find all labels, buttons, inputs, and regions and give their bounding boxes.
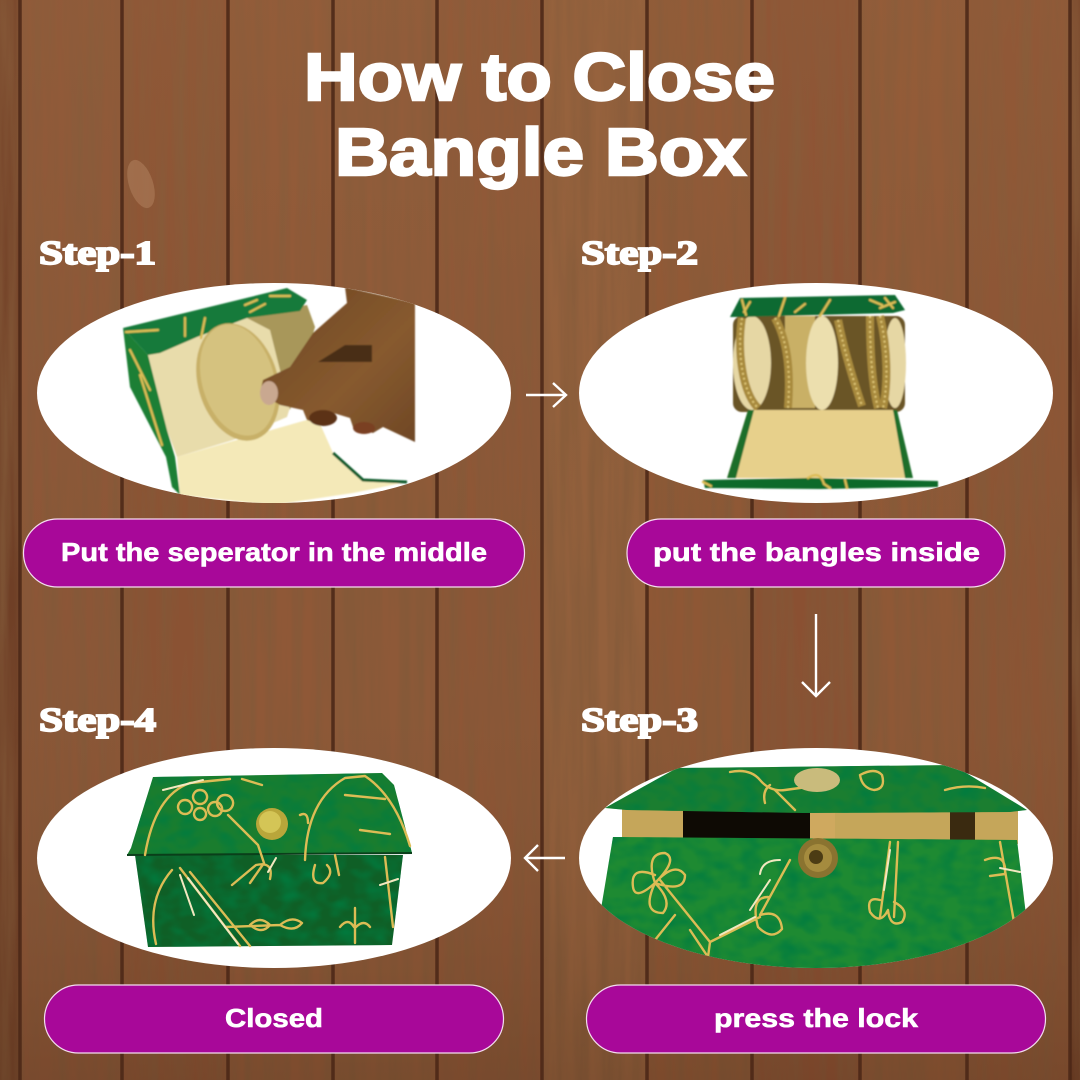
step 4 photo: closed bangle box (37, 748, 511, 968)
step 3 caption pill: press the lock (714, 1003, 919, 1033)
step 4 caption pill: Closed (225, 1003, 323, 1033)
step 1 caption pill (24, 519, 524, 587)
step 3 photo: pressing the snap lock (579, 748, 1053, 980)
arrow: step 1 to step 2 (526, 383, 566, 407)
step 1 caption pill: Put the seperator in the middle (61, 537, 487, 567)
step 2 label: Step-2 (581, 235, 698, 272)
panel: step 3 (579, 702, 1053, 1053)
panel: step 1 (24, 235, 524, 587)
arrow: step 3 to step 4 (525, 845, 565, 871)
title: Bangle Box (335, 115, 746, 190)
panel: step 4 (37, 702, 511, 1053)
step 2 photo: bangles inside open box (579, 283, 1053, 503)
step 2 caption pill: put the bangles inside (653, 537, 980, 567)
step 2 caption pill (627, 519, 1005, 587)
panel: step 2 (579, 235, 1053, 587)
arrow: step 2 to step 3 (802, 614, 830, 696)
title (304, 40, 775, 190)
step 1 photo: separator being placed in the box (37, 283, 511, 505)
step 4 label: Step-4 (39, 702, 156, 739)
step 3 caption pill (586, 985, 1046, 1053)
step 1 label: Step-1 (39, 235, 156, 272)
step 4 caption pill (44, 985, 504, 1053)
title: How to Close (304, 40, 775, 115)
step 3 label: Step-3 (581, 702, 698, 739)
